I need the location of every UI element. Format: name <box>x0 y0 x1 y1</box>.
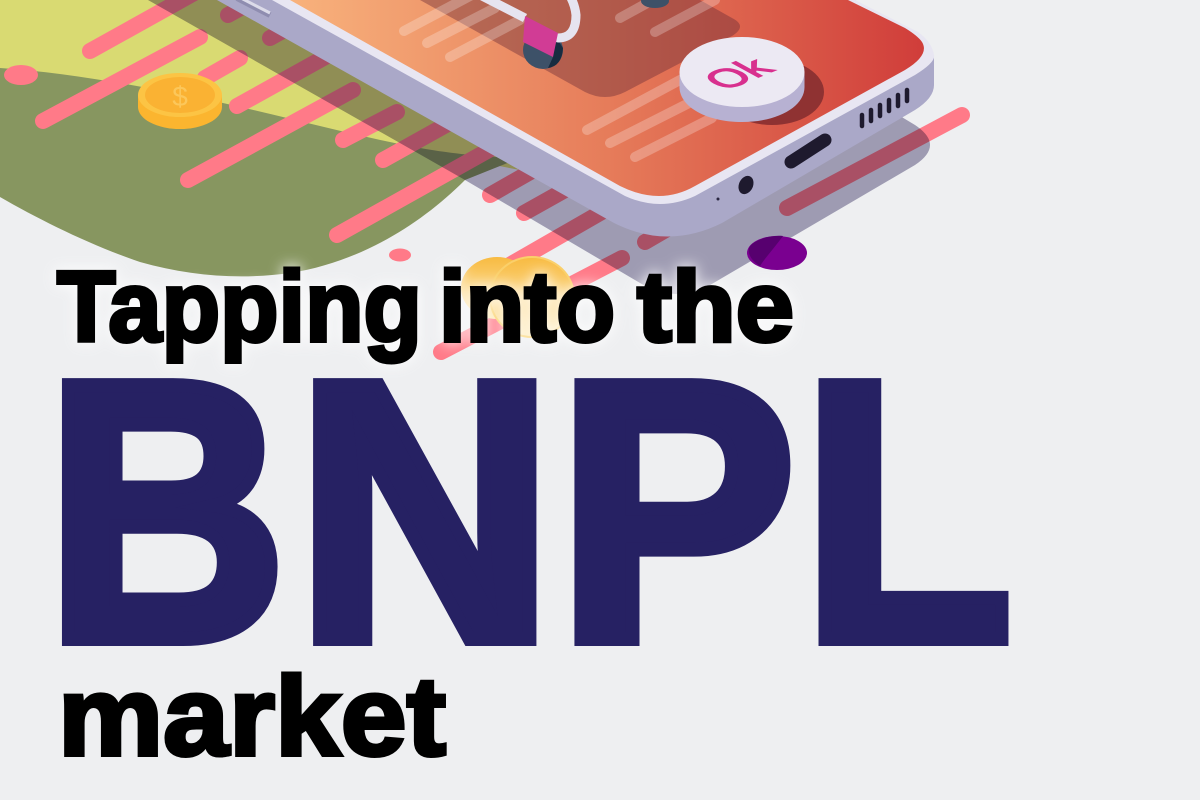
phone ports <box>716 90 907 200</box>
coin: dollar coin on hill: $ <box>172 81 188 112</box>
phone screen <box>290 0 924 196</box>
purple dot <box>747 236 807 270</box>
title: BNPL: N <box>296 305 554 717</box>
OK button: Ok <box>692 52 784 95</box>
title: BNPL: B <box>46 306 286 718</box>
side button <box>237 0 270 15</box>
title glow: Tapping <box>57 251 422 363</box>
phone <box>217 0 934 236</box>
falling speed stripes <box>43 0 962 352</box>
screen card <box>420 0 740 97</box>
title glow: the <box>637 251 794 363</box>
screen stripes <box>404 0 715 157</box>
title: BNPL: P <box>557 305 796 717</box>
phone body <box>217 0 934 236</box>
title: Tapping into the: Tapping <box>57 251 422 363</box>
title glow <box>57 251 794 363</box>
title: market: market <box>58 654 446 779</box>
phone rim <box>272 0 934 204</box>
title glow: into <box>439 251 615 363</box>
title: Tapping into the: the <box>637 251 794 363</box>
phone shadow <box>148 0 930 294</box>
dots <box>4 65 411 262</box>
coins behind title <box>461 257 574 337</box>
strap <box>482 0 669 69</box>
title: BNPL <box>46 305 1013 718</box>
OK button <box>680 37 824 125</box>
title: Tapping into the <box>57 251 794 363</box>
title: BNPL: L <box>802 305 1013 718</box>
title: Tapping into the: into <box>439 251 615 363</box>
coin: dollar coin on hill <box>138 73 222 129</box>
illustration: background hills <box>0 0 520 276</box>
